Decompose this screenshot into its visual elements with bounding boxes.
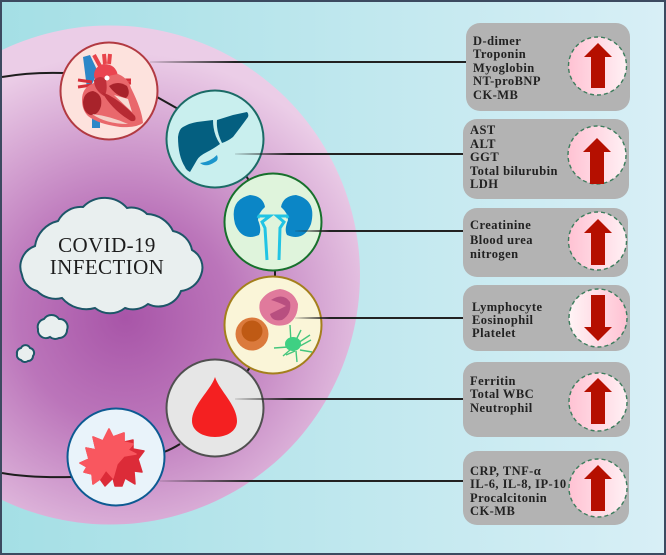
large purple infection circle [2,25,360,525]
panel: kidney markers: nitrogen [470,247,519,261]
panel: kidney markers: Blood urea [470,233,533,247]
panel: cardiac markers: Myoglobin [473,61,535,75]
panel: blood cell markers: Platelet [472,326,516,340]
panel: inflammatory blood markers: Ferritin [470,374,516,388]
icon: virus [68,408,164,506]
thought bubble: small [17,345,34,362]
thought bubble: large [38,315,68,339]
cloud heading: INFECTION [50,255,164,279]
panel: inflammatory blood markers [463,362,630,437]
panel: liver markers [463,119,629,199]
panel: liver markers: ALT [470,137,496,151]
panel: kidney markers [463,208,628,277]
panel: blood cell markers: Eosinophil [472,313,534,327]
panel: inflammatory blood markers: Neutrophil [470,401,533,415]
panel: cardiac markers [466,23,630,111]
panel: liver markers: AST [470,123,496,137]
panel: kidney markers: Creatinine [470,218,531,232]
connector lines to biomarker boxes [150,61,467,482]
panel: cytokine markers: CRP, TNF-α [470,464,541,478]
panel: inflammatory blood markers: Total WBC [470,387,534,401]
icon: kidneys [224,174,322,270]
panel: cardiac markers: CK-MB [473,88,518,102]
panel: liver markers: GGT [470,150,499,164]
panel: blood cell markers [463,285,630,351]
panel: cardiac markers: Troponin [473,47,526,61]
panel: liver markers: Total bilurubin [470,164,558,178]
panel: liver markers: LDH [470,177,498,191]
panel: blood cell markers: Lymphocyte [472,300,542,314]
organ connector curve [2,73,275,477]
panel: cytokine markers: CK-MB [470,504,515,518]
icon: heart [60,42,158,140]
panel: cytokine markers: IL-6, IL-8, IP-10 [470,477,567,491]
panel: cytokine markers [463,451,629,525]
panel: cardiac markers: D-dimer [473,34,521,48]
cloud: COVID-19 infection [20,198,202,313]
panel: cytokine markers: Procalcitonin [470,491,547,505]
panel: cardiac markers: NT-proBNP [473,74,541,88]
icon: blood cells [224,276,322,374]
cloud heading: COVID-19 [58,233,156,257]
icon: blood drop [166,360,264,456]
icon: liver [166,90,264,188]
